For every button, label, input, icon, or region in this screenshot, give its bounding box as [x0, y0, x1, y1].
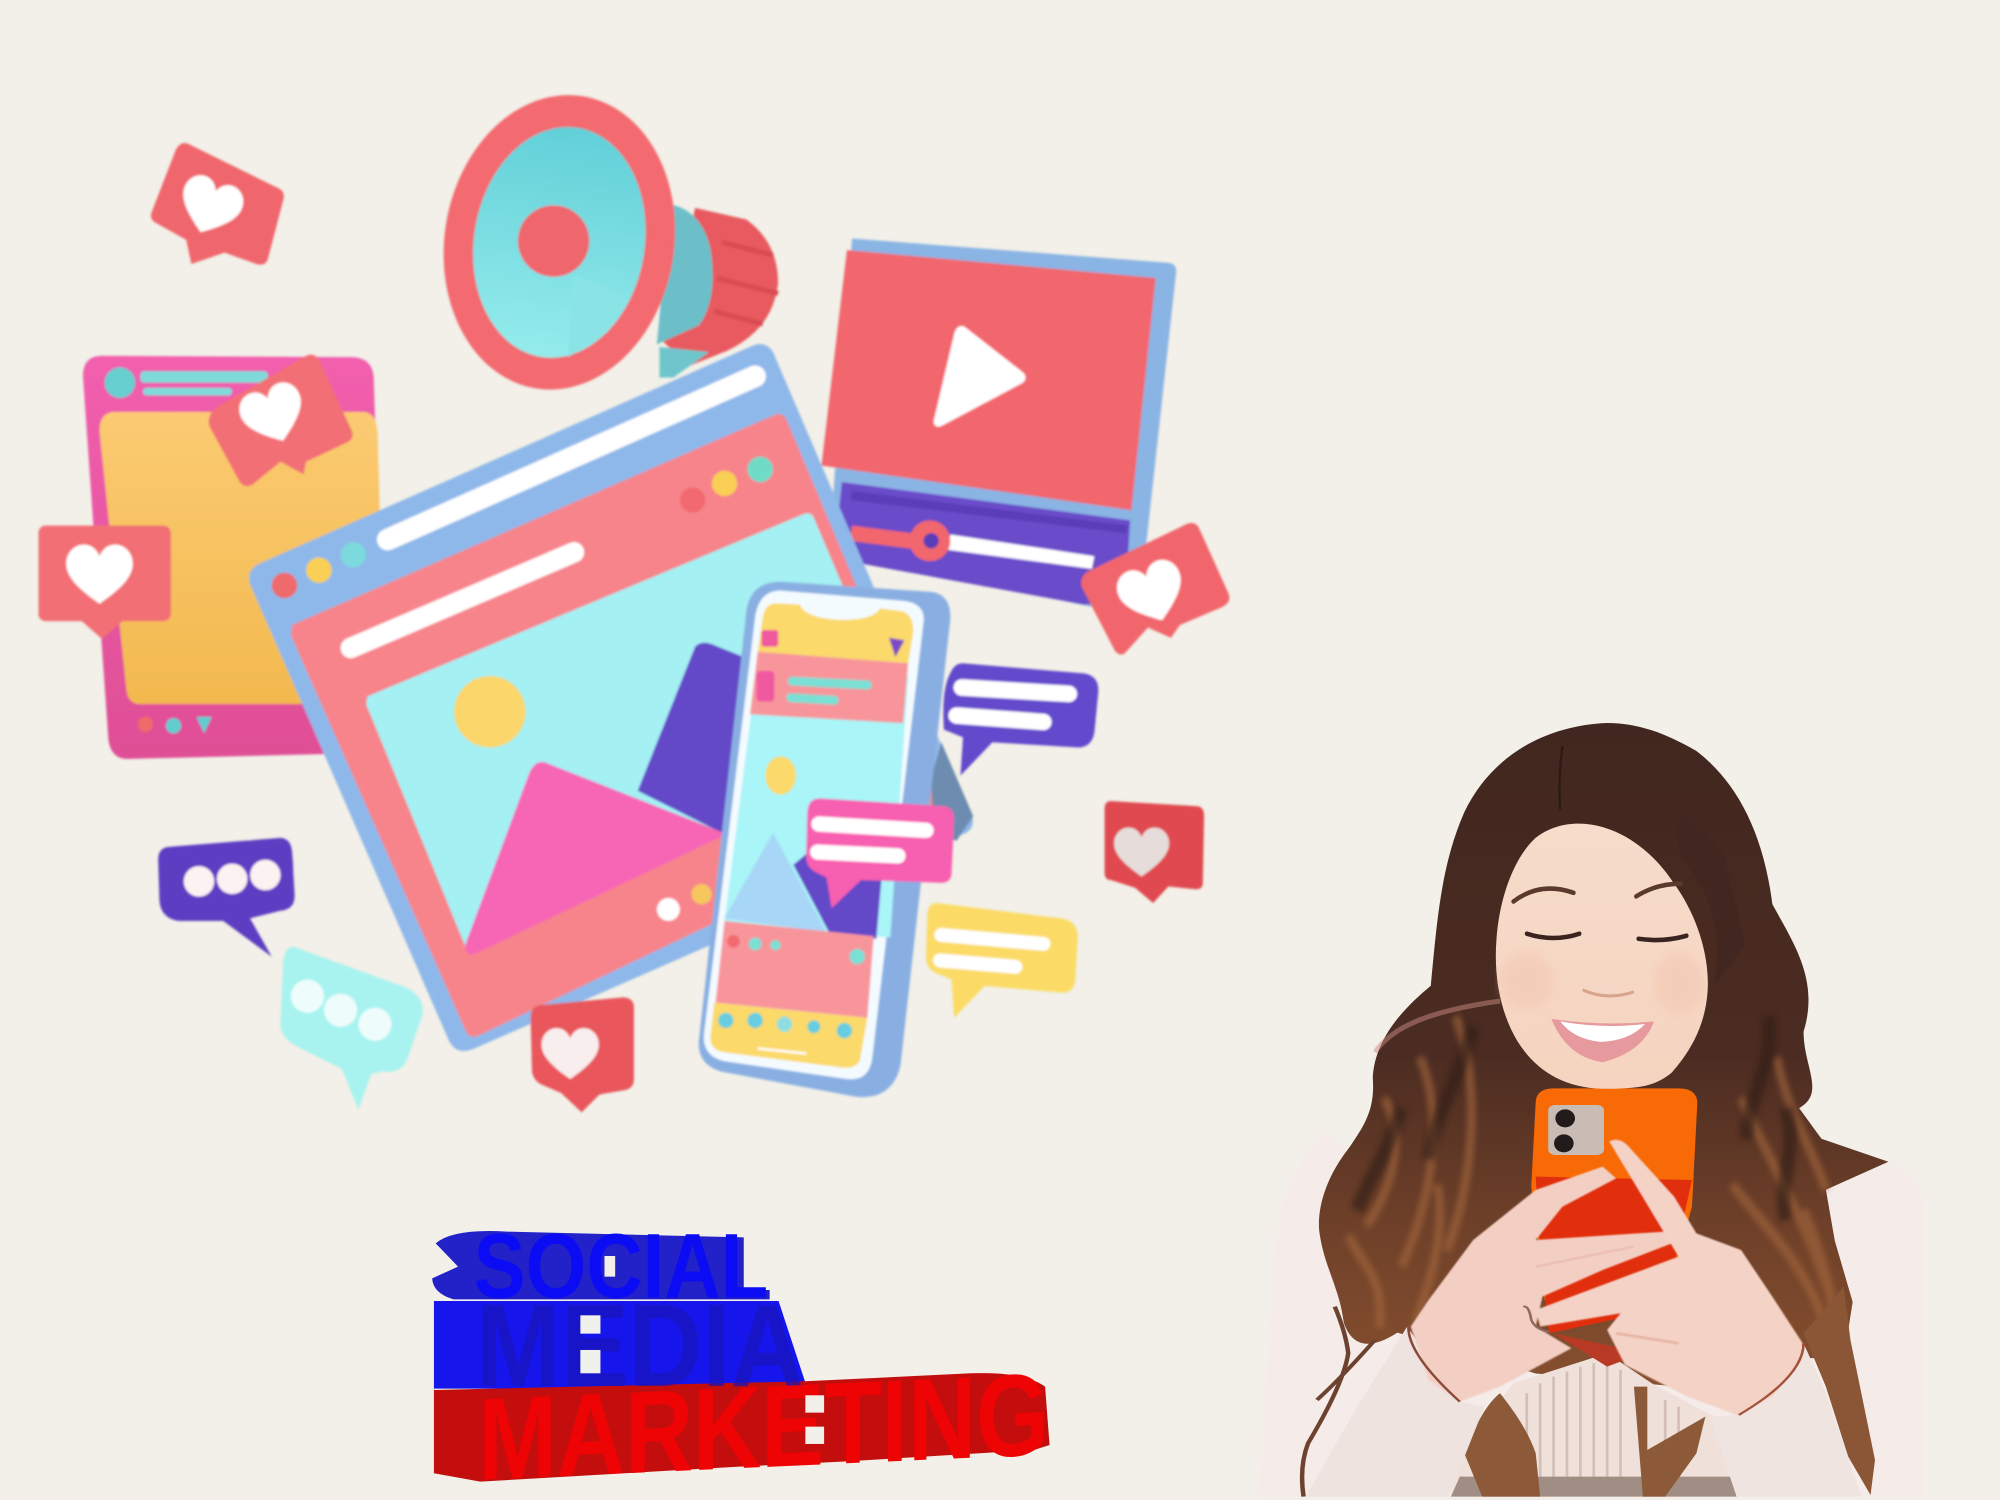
sweater centre ribbed	[1451, 1353, 1737, 1497]
eyebrows	[1513, 884, 1681, 902]
right hair band	[1804, 1287, 1875, 1495]
icon: heart bubble top left	[151, 143, 284, 265]
browser corner behind phone	[931, 742, 973, 841]
phone screen	[724, 663, 908, 938]
icon: dark purple typing bubble	[158, 838, 295, 957]
title word: MARKETING: MARKETING	[478, 1349, 1050, 1500]
browser search bar	[351, 552, 574, 648]
woman holding phone	[1257, 723, 1924, 1498]
phone post footer	[716, 921, 874, 1018]
icon: heart bubble on card	[209, 355, 353, 486]
nose	[1583, 990, 1634, 996]
image pink mountain	[465, 762, 727, 955]
ring	[1523, 1306, 1549, 1332]
icon: purple chat bubble	[943, 663, 1098, 776]
phone image content	[724, 756, 881, 939]
icon: red heart bubble	[1105, 801, 1204, 903]
browser dots right	[680, 457, 773, 513]
sweater bottom band	[1451, 1477, 1737, 1497]
icon: pink chat bubble	[806, 798, 954, 908]
icon: heart bubble bottom	[531, 997, 634, 1112]
browser lower dots	[657, 884, 712, 921]
icon: heart bubble right	[1081, 523, 1229, 654]
title block shape: media	[434, 1301, 805, 1389]
icon: play triangle	[934, 326, 1026, 427]
title word: MEDIA	[476, 1279, 804, 1411]
lower body	[1302, 1088, 1875, 1497]
hair fringe over face	[1679, 802, 1746, 986]
lower hair wisps	[1302, 1307, 1375, 1497]
browser address bar	[388, 376, 755, 540]
panel: pink social post card	[83, 356, 385, 759]
panel: video player	[821, 239, 1176, 615]
panel: smartphone	[699, 582, 950, 1097]
title word: MARKETING	[478, 1349, 1050, 1500]
icon: yellow chat bubble	[926, 903, 1078, 1018]
browser dots left	[272, 542, 366, 598]
left sleeve	[1306, 1327, 1484, 1497]
title block shape: marketing	[434, 1373, 1050, 1482]
title word: SOCIAL: SOCIAL	[474, 1215, 768, 1317]
video progress bar	[849, 520, 1094, 569]
right sleeve	[1710, 1343, 1862, 1497]
hair	[1319, 723, 1888, 1389]
hands	[1411, 1140, 1803, 1415]
icon: megaphone	[423, 78, 778, 406]
illustration: social media 3D icons	[38, 78, 1229, 1112]
sweater cuffs	[1408, 1325, 1460, 1402]
icon: heart bubble left	[38, 526, 171, 639]
phone camera	[1548, 1105, 1604, 1155]
title word: MEDIA: MEDIA	[476, 1279, 804, 1411]
sweater back layer	[1257, 1130, 1924, 1498]
title: Social Media Marketing	[432, 1215, 1050, 1500]
image purple mountain	[638, 643, 765, 842]
phone top bar	[758, 603, 913, 663]
mouth	[1551, 1019, 1654, 1062]
phone app dock	[710, 1003, 867, 1068]
eyes	[1527, 934, 1687, 940]
panel: browser window	[249, 344, 973, 1051]
icon: cyan typing bubble	[280, 947, 423, 1110]
orange phone	[1531, 1088, 1697, 1367]
centre hair strands	[1464, 1387, 1705, 1497]
title word: SOCIAL	[432, 1215, 770, 1317]
phone post header	[750, 630, 908, 723]
image sun	[454, 676, 526, 747]
face	[1496, 802, 1746, 1089]
